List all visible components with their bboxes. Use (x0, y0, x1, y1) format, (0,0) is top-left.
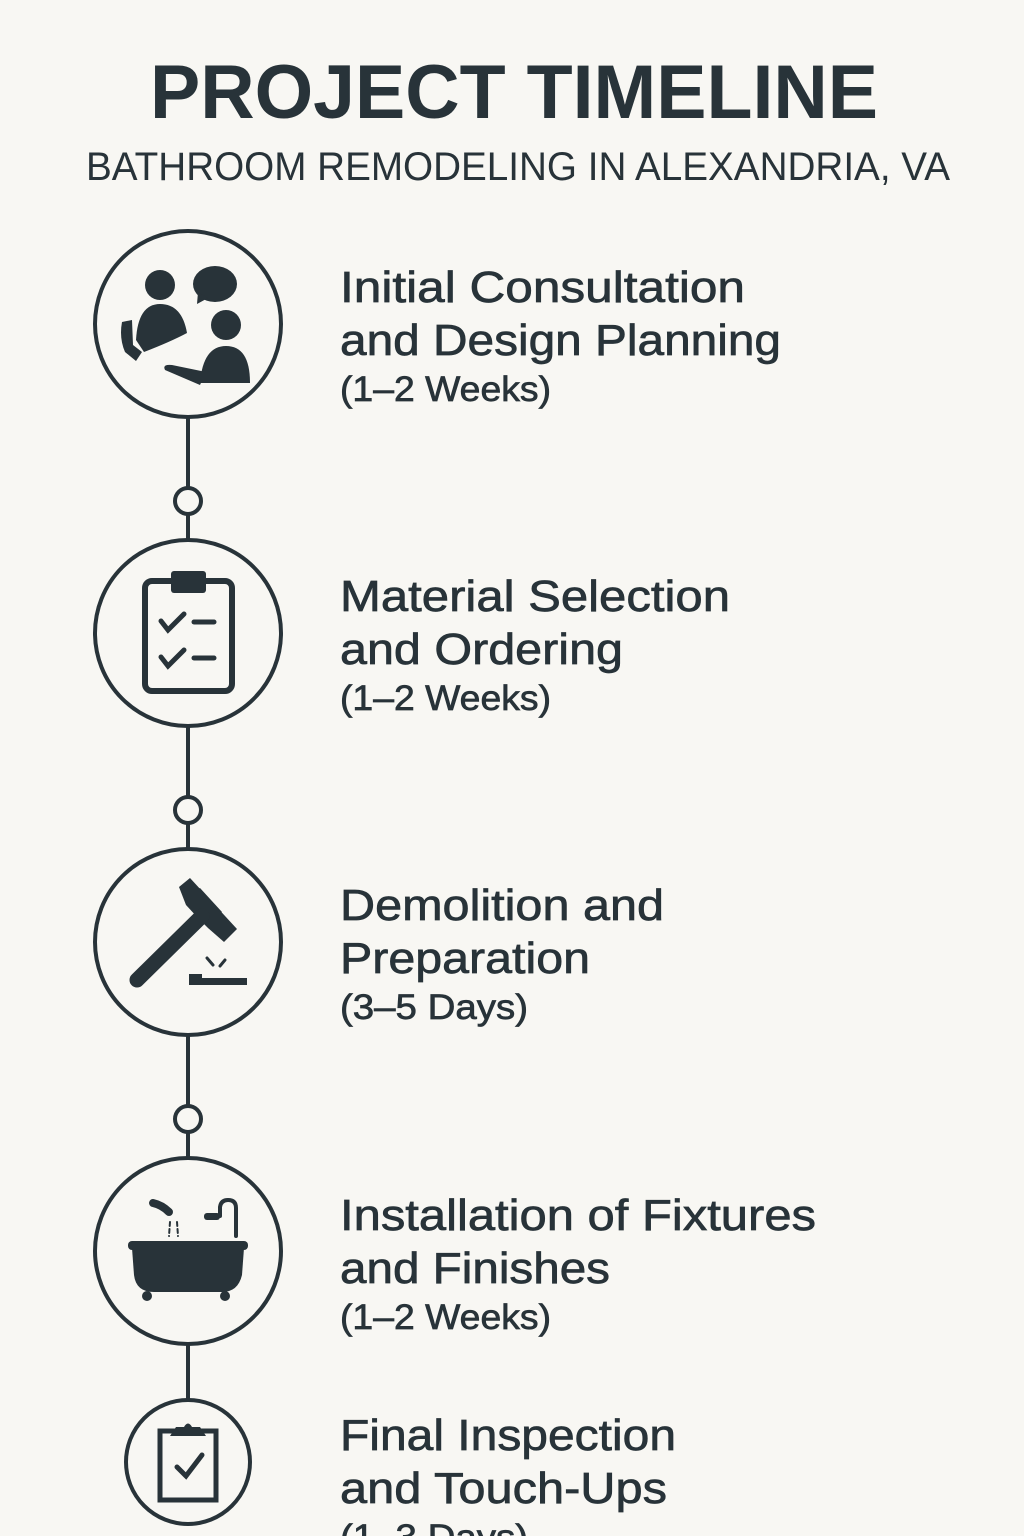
step 3 text: Preparation (340, 934, 590, 983)
step 2 text (340, 572, 730, 718)
step 2 icon: checklist clipboard (95, 540, 281, 726)
step 1 text: (1–2 Weeks) (340, 370, 551, 409)
step 4 text: and Finishes (340, 1244, 610, 1293)
step 1 text (340, 263, 781, 409)
step 5 text (340, 1411, 676, 1536)
step 3 icon: hammer (95, 849, 281, 1035)
step 2 text: (1–2 Weeks) (340, 679, 551, 718)
step 3 text (340, 881, 664, 1027)
step 4 text: (1–2 Weeks) (340, 1298, 551, 1337)
step 5 text: and Touch-Ups (340, 1464, 667, 1513)
title: PROJECT TIMELINE (150, 50, 878, 135)
timeline connector line (186, 417, 190, 1400)
step 4 icon: bathtub (95, 1158, 281, 1344)
step 3 text: (3–5 Days) (340, 988, 528, 1027)
step 1 text: Initial Consultation (340, 263, 745, 312)
step 5 icon: inspection clipboard (126, 1400, 250, 1524)
step 4 text: Installation of Fixtures (340, 1191, 816, 1240)
step 2 text: and Ordering (340, 625, 623, 674)
step 2 text: Material Selection (340, 572, 730, 621)
connector dots (175, 488, 201, 1132)
step 5 text: Final Inspection (340, 1411, 676, 1460)
step 1 icon: consultation (95, 231, 281, 417)
step 3 text: Demolition and (340, 881, 664, 930)
step 1 text: and Design Planning (340, 316, 781, 365)
subtitle: BATHROOM REMODELING IN ALEXANDRIA, VA (86, 145, 950, 189)
step 4 text (340, 1191, 816, 1337)
